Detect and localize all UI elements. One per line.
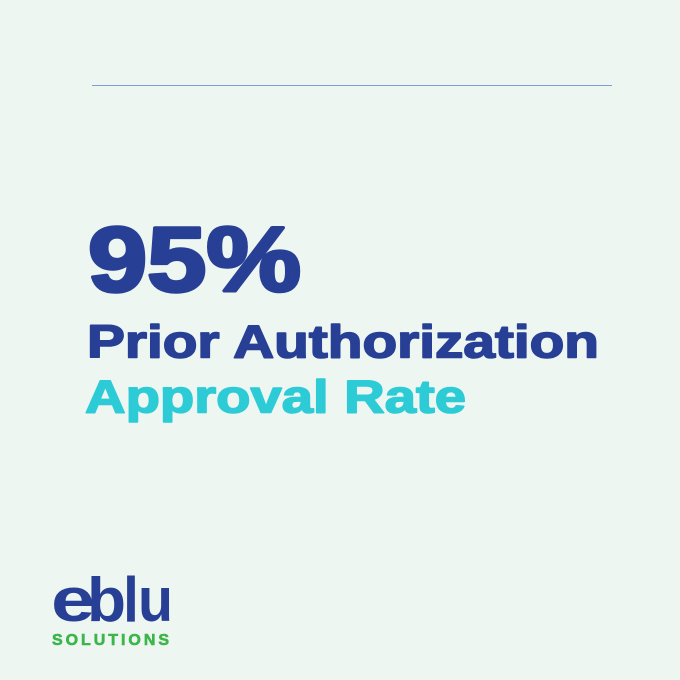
statistic: 95%: 95% <box>88 209 301 311</box>
logo wordmark: eblu: e <box>51 566 95 635</box>
logo wordmark: eblu: b <box>87 566 126 635</box>
logo tagline: SOLUTIONS: SOLUTIONS <box>52 632 169 649</box>
logo wordmark: eblu: u <box>138 566 173 635</box>
logo wordmark: eblu: l <box>124 566 138 635</box>
logo wordmark: eblu <box>51 566 173 635</box>
heading: Prior Authorization: Prior Authorization <box>87 316 599 368</box>
logo: eblu solutions <box>51 566 173 649</box>
heading: Approval Rate: Approval Rate <box>85 370 466 422</box>
